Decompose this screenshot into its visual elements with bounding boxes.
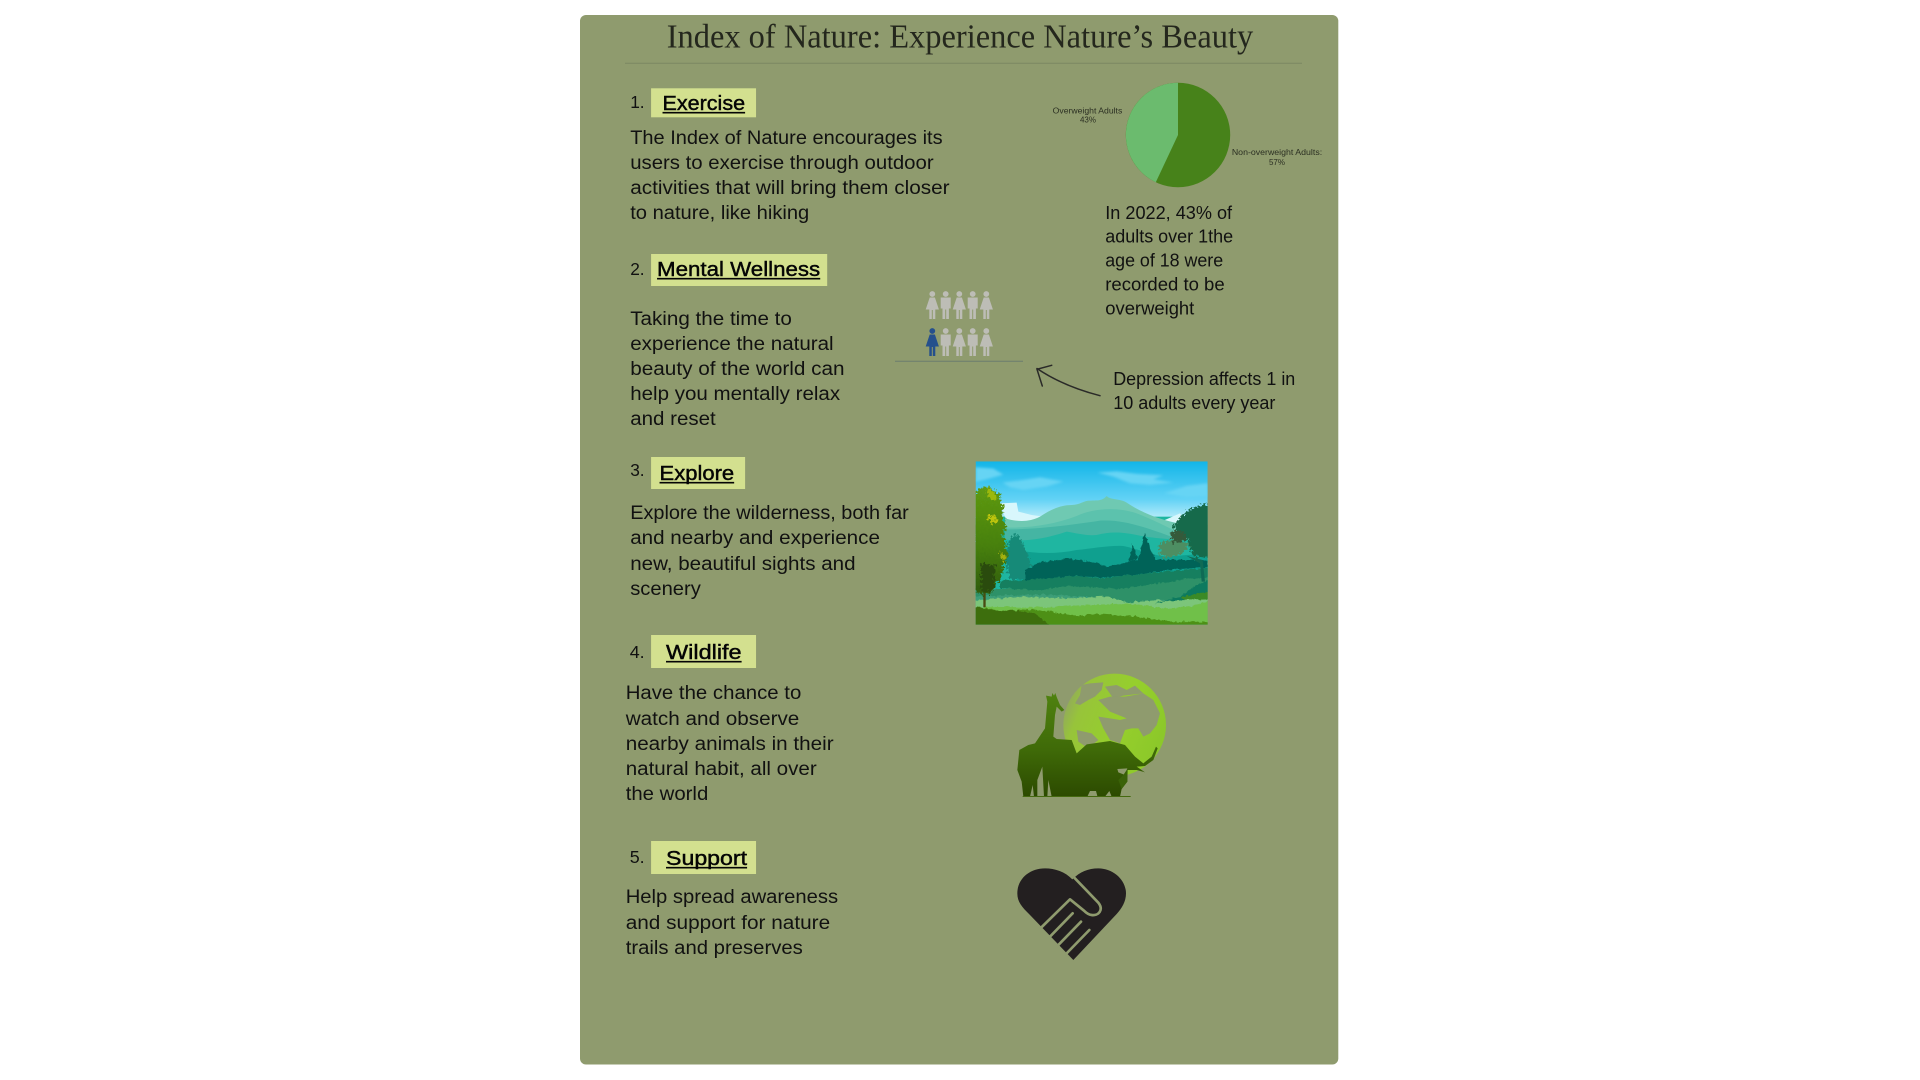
heading: wildlife: 4.	[630, 642, 645, 662]
text block: explore description: Explore the wilderness, both far	[630, 502, 909, 524]
text block: depression statistic: Depression affects 1 in	[1113, 368, 1295, 389]
panel: exercise section	[630, 83, 1322, 319]
heading: support: Support	[666, 847, 747, 870]
text block: explore description: scenery	[630, 578, 701, 600]
text block: explore description: new, beautiful sights and	[630, 553, 856, 575]
icon: handshake heart	[1017, 868, 1126, 960]
icon: globe with wild animals	[1017, 674, 1166, 797]
text block: overweight statistic: overweight	[1105, 297, 1194, 319]
text block: mental wellness description: Taking the time to	[630, 308, 792, 330]
heading: explore: Explore	[660, 462, 734, 485]
heading: exercise: Exercise	[663, 92, 745, 115]
text block: wildlife description	[625, 682, 834, 805]
text block: mental wellness description: beauty of the world can	[630, 358, 845, 380]
pictogram: 1 in 10 people	[895, 291, 1023, 361]
heading: mental wellness	[630, 254, 827, 286]
heading: mental wellness: 2.	[630, 259, 645, 279]
pie chart: overweight adults: 43%	[1080, 116, 1096, 125]
text block: mental wellness description: and reset	[630, 408, 716, 430]
text block: overweight statistic: recorded to be	[1105, 273, 1225, 295]
heading: wildlife	[630, 635, 756, 668]
pie chart: overweight adults	[1053, 83, 1322, 187]
text block: overweight statistic: In 2022, 43% of	[1105, 202, 1233, 223]
text block: wildlife description: the world	[626, 783, 708, 805]
panel: support section	[626, 841, 1126, 960]
panel: infographic background	[580, 15, 1338, 1064]
text block: depression statistic	[1113, 368, 1295, 413]
illustration: mountain landscape	[970, 461, 1213, 630]
text block: mental wellness description: help you mentally relax	[630, 383, 840, 405]
heading: explore: 3.	[630, 460, 645, 480]
text block: exercise description: activities that will bring them closer	[630, 177, 950, 199]
text block: explore description	[630, 502, 909, 600]
text block: support description: Help spread awareness	[626, 886, 838, 908]
heading: support	[630, 841, 756, 874]
text block: exercise description: to nature, like hiking	[630, 202, 809, 224]
text block: overweight statistic: adults over 1the	[1105, 225, 1233, 247]
text block: support description: and support for nature	[626, 912, 830, 934]
tree: right foliage	[1159, 503, 1210, 582]
heading: wildlife: Wildlife	[666, 641, 742, 664]
title: Index of Nature: Experience Nature’s Beauty	[667, 18, 1253, 56]
panel: mental wellness section	[630, 254, 1295, 430]
pie chart: overweight adults: Overweight Adults	[1053, 106, 1122, 115]
text block: wildlife description: nearby animals in their	[626, 733, 834, 755]
text block: support description	[626, 886, 838, 959]
text block: overweight statistic: age of 18 were	[1105, 249, 1223, 271]
text block: exercise description: users to exercise through outdoor	[630, 152, 934, 174]
text block: overweight statistic	[1105, 202, 1233, 319]
arrow: points to pictogram	[1037, 365, 1100, 396]
text block: wildlife description: watch and observe	[625, 708, 799, 730]
panel: explore section	[630, 457, 1213, 630]
text block: mental wellness description	[630, 308, 845, 430]
heading: explore	[630, 457, 745, 489]
text block: explore description: and nearby and experience	[630, 527, 880, 549]
text block: exercise description	[630, 127, 950, 224]
text block: wildlife description: natural habit, all over	[626, 758, 817, 780]
text block: mental wellness description: experience the natural	[630, 333, 834, 355]
text block: wildlife description: Have the chance to	[626, 682, 801, 704]
text block: depression statistic: 10 adults every year	[1113, 392, 1275, 413]
pie chart: overweight adults: Non-overweight Adults:	[1232, 148, 1322, 157]
heading: mental wellness: Mental Wellness	[657, 258, 820, 281]
pie chart: overweight adults: 57%	[1269, 158, 1285, 167]
tree: left foliage	[973, 486, 1008, 607]
heading: exercise: 1.	[630, 92, 645, 112]
panel: wildlife section	[625, 635, 1166, 805]
text block: exercise description: The Index of Nature encourages its	[630, 127, 943, 149]
heading: support: 5.	[630, 847, 645, 867]
heading: exercise	[630, 88, 756, 117]
text block: support description: trails and preserves	[626, 937, 803, 959]
